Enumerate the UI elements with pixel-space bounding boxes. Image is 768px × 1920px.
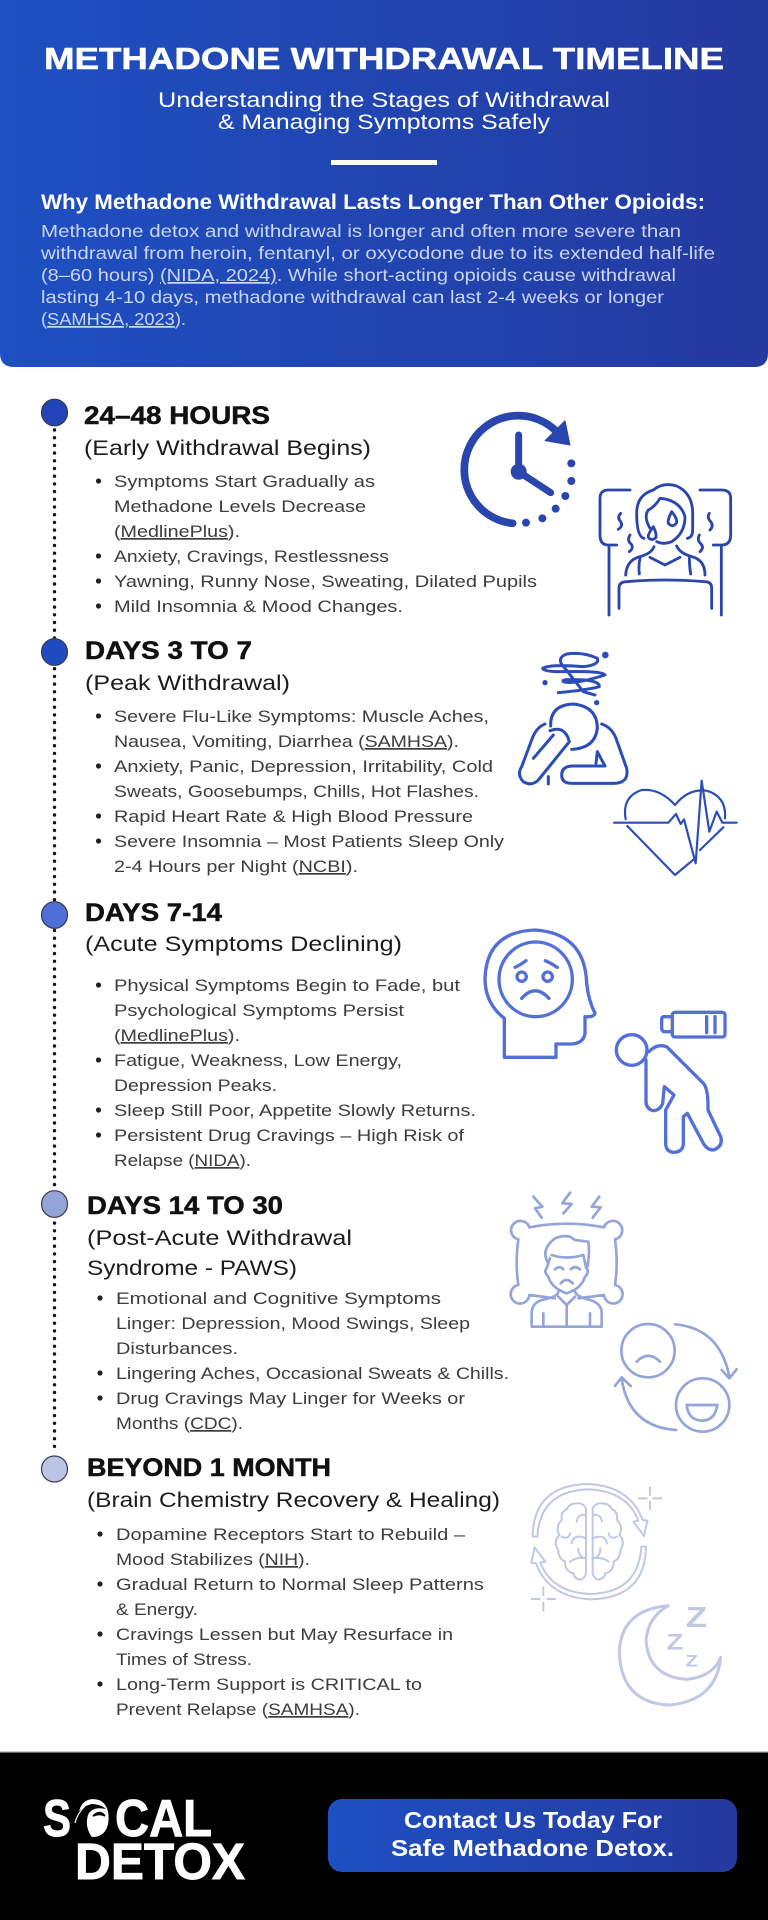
symptom list: Anxiety, Cravings, Restlessness [114, 547, 389, 566]
panel: days 14 to 30 [42, 1191, 737, 1433]
symptom list: Months ( CDC ). [116, 1414, 243, 1433]
symptom list: Emotional and Cognitive Symptoms [116, 1289, 441, 1308]
text block: explanation: (8–60 hours) (NIDA, 2024) . While short-acting opioids cause withdrawal [41, 265, 676, 285]
symptom list: Methadone Levels Decrease [114, 497, 366, 516]
symptom list: Persistent Drug Cravings – High Risk of [114, 1126, 464, 1145]
icon: heart with ECG pulse [614, 781, 737, 875]
subtitle [158, 88, 610, 134]
text block: explanation: (SAMHSA, 2023 ). [41, 309, 186, 329]
text block: explanation [40, 221, 715, 329]
heading: BEYOND 1 MONTH [87, 1454, 331, 1482]
timeline marker [42, 639, 68, 665]
symptom list: Severe Flu-Like Symptoms: Muscle Aches, [114, 707, 489, 726]
call-to-action button [328, 1799, 737, 1872]
symptom list: (MedlinePlus ). [114, 522, 240, 541]
panel: beyond 1 month [42, 1454, 721, 1719]
panel: footer [0, 1751, 768, 1920]
panel: days 7-14 [42, 899, 725, 1170]
symptom list: Linger: Depression, Mood Swings, Sleep [116, 1314, 470, 1333]
logo: SoCal Detox: CAL [115, 1790, 212, 1848]
symptom list: & Energy. [116, 1600, 198, 1619]
symptom list: Rapid Heart Rate & High Blood Pressure [114, 807, 473, 826]
icon: mood swing faces [615, 1324, 737, 1432]
symptom list: Lingering Aches, Occasional Sweats & Chills. [116, 1364, 509, 1383]
symptom list: Sweats, Goosebumps, Chills, Hot Flashes. [114, 782, 479, 801]
subheading: (Early Withdrawal Begins) [84, 436, 371, 460]
heading: DAYS 7-14 [85, 899, 222, 927]
timeline marker [42, 902, 68, 928]
symptom list: Drug Cravings May Linger for Weeks or [116, 1389, 465, 1408]
symptom list: Physical Symptoms Begin to Fade, but [114, 976, 460, 995]
icon: moon with sleep letters [619, 1602, 721, 1705]
panel: days 3 to 7 [42, 637, 737, 876]
icon: moon with sleep letters: Z [686, 1652, 698, 1670]
symptom list [96, 472, 537, 616]
symptom list: Relapse ( NIDA ). [114, 1151, 251, 1170]
title: METHADONE WITHDRAWAL TIMELINE [44, 41, 724, 76]
subheading: Syndrome - PAWS) [87, 1256, 297, 1280]
subtitle: & Managing Symptoms Safely [218, 110, 550, 134]
timeline marker [42, 1456, 68, 1482]
symptom list: Anxiety, Panic, Depression, Irritability, Cold [114, 757, 493, 776]
subheading [87, 1226, 352, 1280]
heading: DAYS 14 TO 30 [87, 1192, 283, 1220]
call-to-action button: Contact Us Today For [404, 1807, 662, 1833]
symptom list: Psychological Symptoms Persist [114, 1001, 404, 1020]
icon: moon with sleep letters: Z [686, 1602, 707, 1634]
symptom list: Mild Insomnia & Mood Changes. [114, 597, 403, 616]
symptom list: Dopamine Receptors Start to Rebuild – [116, 1525, 466, 1544]
logo: SoCal Detox: DETOX [75, 1833, 245, 1890]
symptom list: (MedlinePlus ). [114, 1026, 240, 1045]
subheading: (Brain Chemistry Recovery & Healing) [87, 1488, 500, 1512]
logo: SoCal Detox: O [77, 1790, 110, 1848]
text block: explanation: Methadone detox and withdrawal is longer and often more severe than [41, 221, 681, 241]
subheading: (Peak Withdrawal) [85, 671, 290, 695]
heading: why methadone withdrawal lasts longer: Why Methadone Withdrawal Lasts Longer Than Other Opioids: [41, 191, 705, 214]
heading: DAYS 3 TO 7 [85, 637, 252, 665]
symptom list: Cravings Lessen but May Resurface in [116, 1625, 453, 1644]
symptom list: Fatigue, Weakness, Low Energy, [114, 1051, 402, 1070]
symptom list [96, 976, 476, 1170]
symptom list: 2-4 Hours per Night ( NCBI ). [114, 857, 358, 876]
logo: SoCal Detox: S [43, 1790, 71, 1848]
panel: header [0, 0, 768, 367]
heading: 24–48 HOURS [84, 402, 270, 430]
symptom list: Prevent Relapse ( SAMHSA ). [116, 1700, 360, 1719]
subheading: (Post-Acute Withdrawal [87, 1226, 352, 1250]
symptom list: Long-Term Support is CRITICAL to [116, 1675, 422, 1694]
subtitle: Understanding the Stages of Withdrawal [158, 88, 610, 112]
logo: SoCal Detox [43, 1790, 245, 1890]
symptom list: Times of Stress. [116, 1650, 252, 1669]
icon: man awake on pillow [511, 1193, 623, 1327]
symptom list: Sleep Still Poor, Appetite Slowly Returns. [114, 1101, 476, 1120]
icon: person with dizzy head [520, 652, 627, 784]
icon: exhausted person with low battery [616, 1012, 725, 1152]
timeline line [53, 430, 56, 1448]
text block: explanation: withdrawal from heroin, fentanyl, or oxycodone due to its extended half-life [40, 243, 715, 263]
symptom list: Nausea, Vomiting, Diarrhea ( SAMHSA ). [114, 732, 459, 751]
symptom list [97, 1289, 509, 1433]
icon: moon with sleep letters: Z [667, 1629, 683, 1654]
icon: clock [464, 416, 575, 527]
icon: brain with recovery arrows [531, 1484, 661, 1611]
call-to-action button: Safe Methadone Detox. [391, 1835, 674, 1861]
text block: explanation: lasting 4-10 days, methadone withdrawal can last 2-4 weeks or longer [41, 287, 664, 307]
icon: patient sweating in bed [600, 485, 731, 615]
symptom list [96, 707, 505, 876]
timeline marker [42, 399, 68, 426]
timeline marker [42, 1191, 68, 1217]
symptom list: Severe Insomnia – Most Patients Sleep Only [114, 832, 505, 851]
panel: 24-48 hours [42, 399, 731, 616]
symptom list: Mood Stabilizes ( NIH). [116, 1550, 310, 1569]
symptom list: Depression Peaks. [114, 1076, 277, 1095]
symptom list: Gradual Return to Normal Sleep Patterns [116, 1575, 484, 1594]
subheading: (Acute Symptoms Declining) [85, 932, 402, 956]
symptom list [97, 1525, 484, 1719]
symptom list: Yawning, Runny Nose, Sweating, Dilated Pupils [114, 572, 537, 591]
symptom list: Symptoms Start Gradually as [114, 472, 375, 491]
symptom list: Disturbances. [116, 1339, 238, 1358]
icon: sad face in head [485, 930, 595, 1057]
